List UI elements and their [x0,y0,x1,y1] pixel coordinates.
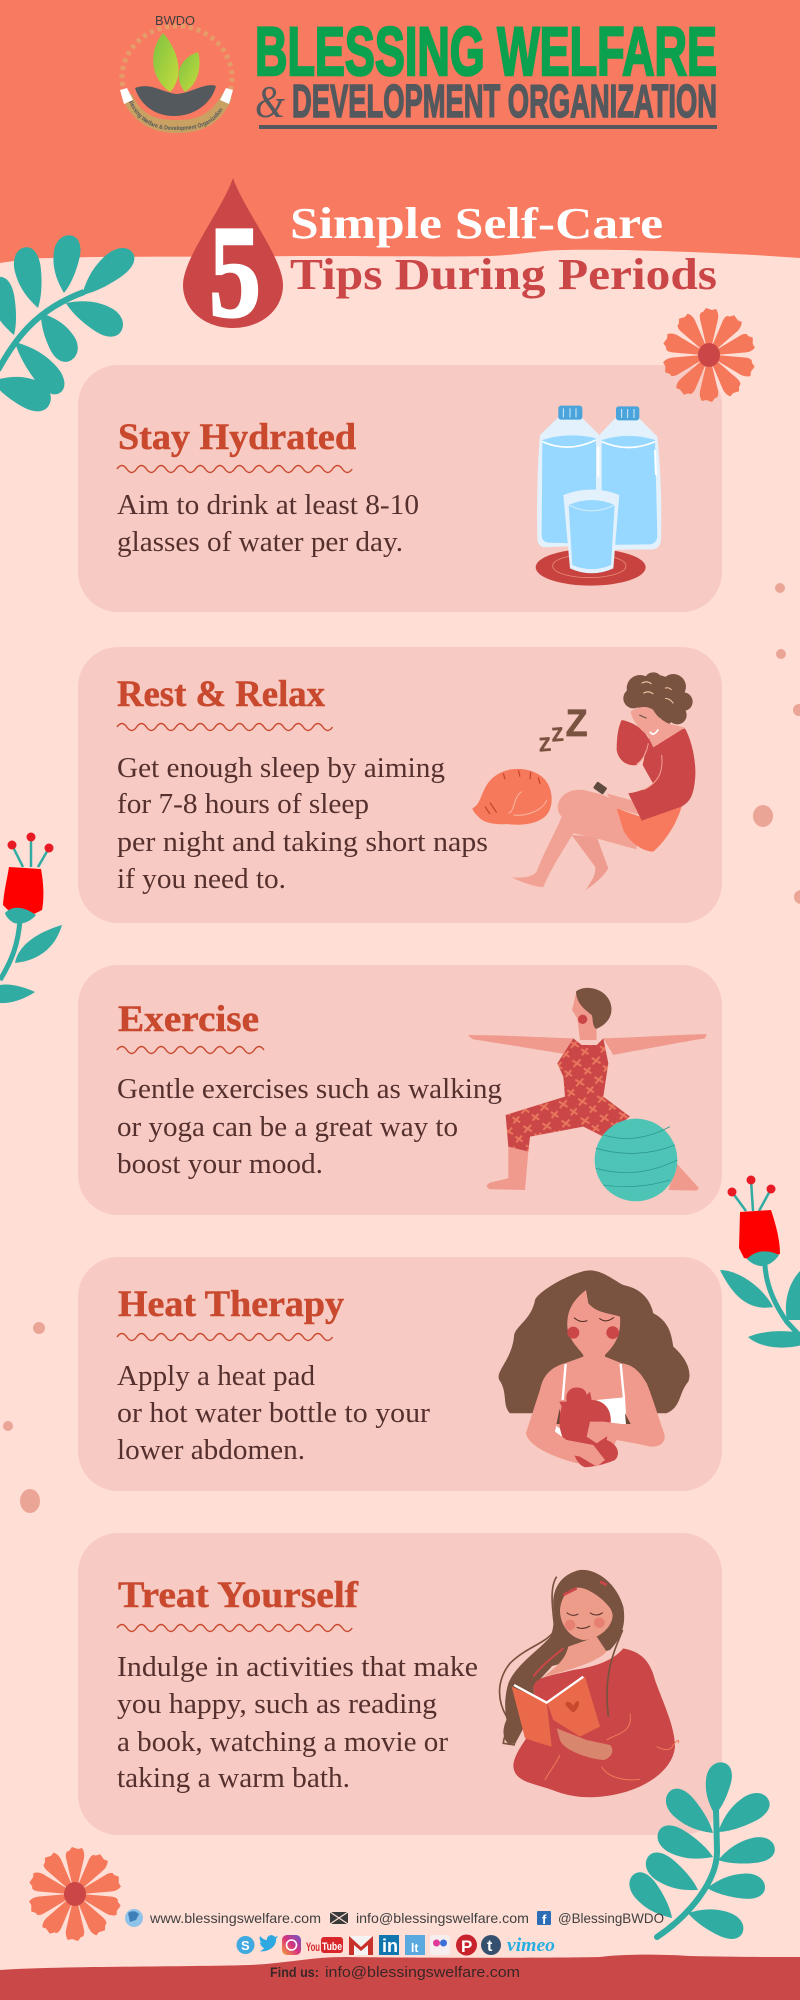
leaf branch: top left [0,234,140,416]
icon: blue tile [405,1935,425,1955]
text [117,752,488,895]
logo [120,13,234,133]
illustration: woman reading a book [500,1570,679,1797]
panel: treat yourself [78,1533,722,1835]
text: per night and taking short naps [117,826,488,858]
cat [472,769,552,825]
heading: Rest & Relax [117,674,325,715]
contact line: info@blessingswelfare.com [356,1910,529,1926]
icon: tumblr [481,1935,501,1955]
icon: instagram [282,1935,301,1955]
flower: top right [661,308,757,402]
icon: blue tile: lt [411,1941,418,1955]
squiggle [117,1046,264,1054]
flower: bottom left [27,1847,123,1941]
illustration: yoga woman with ball [468,988,707,1201]
text: lower abdomen. [117,1434,305,1466]
text: for 7-8 hours of sleep [117,788,369,820]
icon: facebook: f [542,1912,547,1927]
footer contact: Find us: [270,1964,319,1980]
icon: skype: S [241,1938,250,1953]
icon: twitter [259,1935,278,1951]
sleep letters [538,702,588,756]
squiggle [117,1624,352,1632]
icon: facebook [537,1911,551,1927]
squiggle [117,724,333,730]
icon: blood drop with number 5 [183,178,283,345]
heading: Treat Yourself [118,1575,359,1616]
icon: mail [330,1912,348,1924]
title: Tips During Periods [290,250,717,299]
sleep letters: Z [551,725,564,746]
heading: Stay Hydrated [118,417,356,458]
illustration: woman with hot water bottle [499,1270,689,1467]
icon: pinterest: P [461,1937,472,1956]
text [117,489,419,558]
panel: rest and relax [78,647,722,923]
icon: flickr [430,1935,450,1955]
decorative dots [3,583,800,1513]
text [117,1651,478,1794]
text: Indulge in activities that make [117,1651,478,1683]
icon: linkedin: in [382,1936,398,1956]
flower stem: left tulip [0,832,62,1003]
text: you happy, such as reading [117,1688,437,1720]
text: if you need to. [117,863,286,895]
footer band [0,1955,800,2000]
panel: stay hydrated [78,365,722,612]
title [290,199,717,299]
text: Gentle exercises such as walking [117,1073,502,1105]
contact line: @BlessingBWDO [558,1910,664,1926]
footer contact: info@blessingswelfare.com [325,1964,520,1981]
text: boost your mood. [117,1148,323,1180]
icon: globe [125,1909,143,1927]
icon: youtube: Tube [322,1941,342,1953]
sleep letters: Z [566,702,588,745]
heading: Exercise [118,999,259,1040]
social icons [236,1934,555,1956]
squiggle [117,466,352,472]
contact line: www.blessingswelfare.com [149,1910,321,1926]
icon: blood drop with number 5: 5 [209,198,261,345]
heading: Heat Therapy [118,1284,344,1325]
text: glasses of water per day. [117,526,403,558]
text: Get enough sleep by aiming [117,752,445,784]
text: or yoga can be a great way to [117,1111,458,1143]
header band [0,0,800,263]
sleep letters: Z [538,735,552,756]
icon: vimeo: vimeo [507,1935,555,1956]
text [117,1360,430,1466]
flower stem: right tulip [720,1176,800,1348]
contact line [125,1909,664,1927]
icon: pinterest [456,1934,477,1956]
text [117,1073,502,1180]
text: or hot water bottle to your [117,1397,430,1429]
organization name: & [255,76,285,127]
icon: youtube [306,1937,343,1954]
text: Aim to drink at least 8-10 [117,489,419,521]
icon: gmail [349,1936,373,1955]
panel: heat therapy [78,1257,722,1491]
icon: tumblr: t [487,1938,493,1955]
squiggle [117,1334,333,1340]
icon: youtube: You [306,1940,320,1954]
text: Apply a heat pad [117,1360,315,1392]
icon: water bottles and glass [536,406,661,586]
illustration: sleeping woman and cat [472,672,695,890]
logo: Blessing Welfare & Development Organization [128,100,223,132]
text: a book, watching a movie or [117,1726,448,1758]
icon: skype [236,1936,254,1954]
text: taking a warm bath. [117,1762,350,1794]
title: Simple Self-Care [290,199,663,248]
logo: BWDO [155,13,195,28]
organization name [255,13,717,129]
panel: exercise [78,965,722,1215]
leaf branch: bottom right [623,1760,777,1943]
